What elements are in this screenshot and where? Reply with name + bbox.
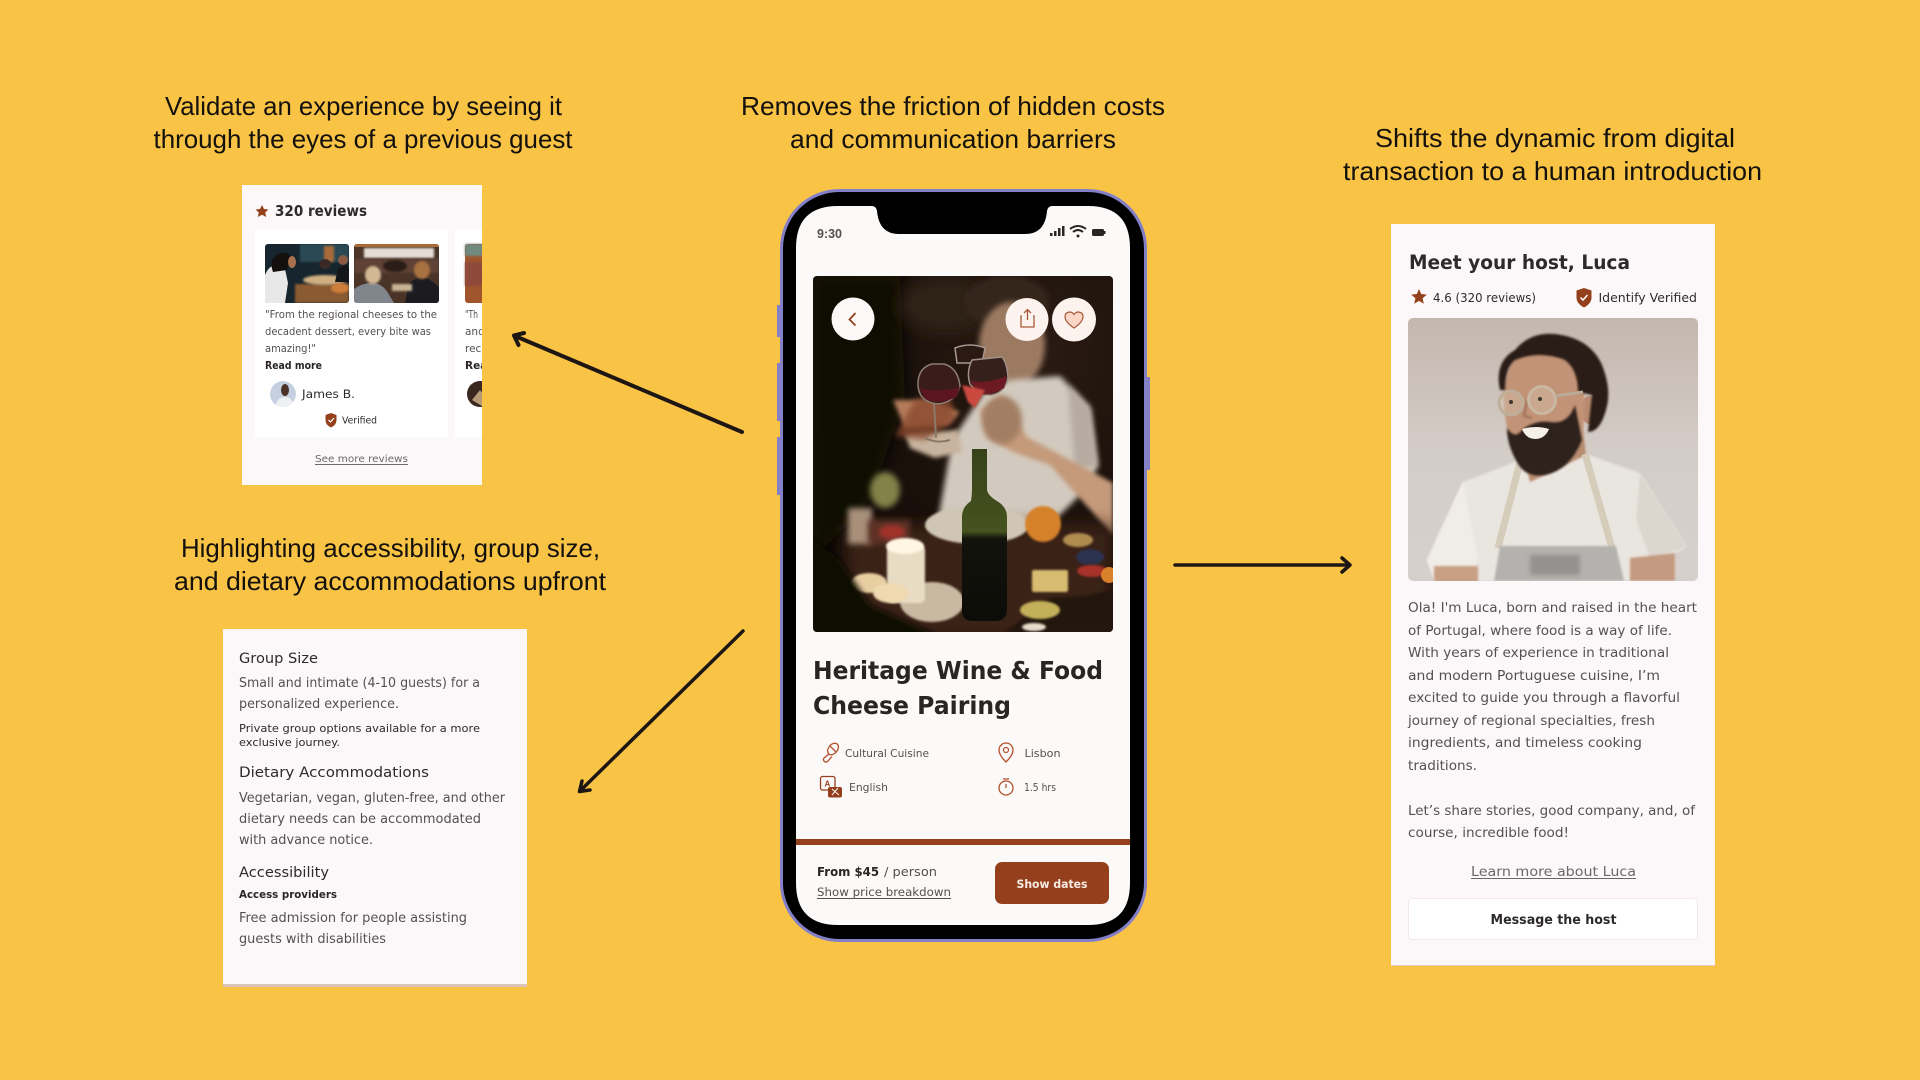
host bio: and modern Portuguese cuisine, I’m	[1408, 668, 1660, 684]
detail: language: English	[849, 782, 888, 794]
review card: James B.	[265, 244, 439, 428]
price	[817, 865, 937, 879]
learn more link: Learn more about Luca	[1471, 864, 1636, 880]
host bio: Ola! I'm Luca, born and raised in the heart	[1408, 600, 1697, 616]
review card: second, cropped: "Th	[465, 309, 478, 321]
verified badge: Verified	[342, 416, 377, 426]
section: dietary accommodations: Vegetarian, vegan, gluten-free, and other	[239, 790, 505, 806]
host bio: excited to guide you through a flavorful	[1408, 690, 1680, 706]
heading: reviews annotation: through the eyes of a previous guest	[154, 124, 573, 154]
section: accessibility: Access providers	[239, 889, 337, 901]
identity verified badge: Identify Verified	[1598, 291, 1697, 305]
heart button	[1052, 298, 1096, 342]
heading: accessibility annotation: and dietary accommodations upfront	[174, 566, 607, 596]
panel: group size, dietary, accessibility	[223, 629, 527, 987]
section: accessibility: Free admission for people assisting	[239, 910, 467, 926]
phone screen	[796, 206, 1130, 925]
identity verified badge	[1576, 288, 1697, 308]
arrow: phone to host panel	[1175, 558, 1350, 572]
review photo: group dining	[354, 244, 439, 303]
host bio: journey of regional specialties, fresh	[1407, 713, 1655, 729]
experience title: Cheese Pairing	[813, 691, 1011, 720]
section: dietary accommodations: with advance notice.	[239, 832, 373, 848]
host photo: Luca	[1408, 318, 1698, 584]
price breakdown link: Show price breakdown	[817, 885, 951, 899]
price: / person	[884, 865, 937, 879]
read more link: Read more	[265, 360, 322, 372]
heading: host annotation: Shifts the dynamic from digital	[1375, 123, 1735, 153]
detail: language	[820, 776, 888, 798]
reviewer avatar	[270, 381, 296, 407]
heading: phone annotation: and communication barriers	[790, 124, 1116, 154]
experience title: Heritage Wine & Food	[813, 656, 1103, 685]
detail: cuisine: Cultural Cuisine	[845, 748, 929, 760]
review card: second, cropped: Read	[465, 360, 495, 372]
message the host button: Message the host	[1490, 913, 1616, 928]
icon: review star	[256, 205, 268, 217]
show dates button	[995, 862, 1109, 904]
detail: location: Lisbon	[1024, 748, 1060, 760]
detail: duration: 1.5 hrs	[1024, 782, 1056, 794]
section: group size: Small and intimate (4-10 guests) for a	[239, 675, 480, 691]
host bio: course, incredible food!	[1408, 825, 1569, 841]
review quote	[265, 309, 437, 355]
arrow: phone to reviews	[514, 333, 742, 432]
section: group size	[239, 651, 480, 749]
section: dietary accommodations	[239, 765, 505, 848]
review card: second, cropped: rec	[465, 343, 482, 355]
phone mockup	[777, 190, 1150, 940]
heading: host annotation: transaction to a human introduction	[1343, 156, 1762, 186]
review card: second, cropped	[464, 242, 482, 407]
review quote: "From the regional cheeses to the	[265, 309, 437, 321]
hero photo: wine toast	[813, 276, 1117, 650]
panel: reviews	[242, 185, 495, 485]
host bio: ingredients, and timeless cooking	[1408, 735, 1642, 751]
heading: accessibility annotation	[174, 533, 607, 596]
section: accessibility	[239, 865, 467, 947]
heading: phone annotation	[741, 91, 1165, 154]
host bio: Let’s share stories, good company, and, of	[1408, 803, 1696, 819]
section: dietary accommodations: Dietary Accommodations	[239, 765, 429, 781]
section: group size: Group Size	[239, 651, 318, 667]
heading: accessibility annotation: Highlighting accessibility, group size,	[181, 533, 600, 563]
section: dietary accommodations: dietary needs can be accommodated	[239, 811, 481, 827]
phone body	[782, 190, 1146, 940]
show dates button: Show dates	[1016, 877, 1088, 891]
host bio: of Portugal, where food is a way of life.	[1408, 623, 1672, 639]
status time: 9:30	[817, 227, 842, 241]
review card: second, cropped: and	[465, 326, 485, 338]
arrow: phone to details panel	[580, 631, 743, 792]
heading: phone annotation: Removes the friction of hidden costs	[741, 91, 1165, 121]
status icons	[1050, 226, 1106, 238]
detail: cuisine	[824, 741, 929, 762]
heading: reviews annotation	[154, 91, 573, 154]
booking bar divider	[796, 839, 1130, 845]
verified badge	[326, 413, 377, 428]
back button	[832, 298, 874, 340]
review photo: diners at table	[265, 244, 349, 303]
section: accessibility: guests with disabilities	[239, 931, 386, 947]
section: accessibility: Accessibility	[239, 865, 329, 881]
panel: meet your host	[1391, 224, 1715, 966]
heading: host annotation	[1343, 123, 1762, 186]
section: group size: personalized experience.	[239, 696, 399, 712]
experience title	[813, 656, 1103, 720]
phone side buttons	[777, 305, 1150, 495]
host bio: traditions.	[1408, 758, 1477, 774]
review quote: decadent dessert, every bite was	[265, 326, 431, 338]
section: group size: Private group options available for a more	[239, 722, 480, 735]
review quote: amazing!"	[265, 343, 316, 355]
see more reviews link: See more reviews	[315, 454, 408, 465]
detail: location	[999, 743, 1060, 762]
price: From $45	[817, 865, 879, 879]
host bio	[1407, 600, 1697, 841]
detail: language: A	[824, 780, 830, 788]
detail: duration	[999, 779, 1056, 795]
section: group size: exclusive journey.	[239, 736, 340, 749]
share button	[1006, 298, 1048, 341]
heading: reviews annotation: Validate an experience by seeing it	[165, 91, 563, 121]
host heading: Meet your host, Luca	[1409, 251, 1630, 274]
reviewer name: James B.	[301, 387, 355, 401]
host rating: 4.6 (320 reviews)	[1433, 291, 1536, 305]
message the host button	[1408, 898, 1698, 940]
host bio: With years of experience in traditional	[1408, 645, 1669, 661]
review count: 320 reviews	[275, 202, 367, 220]
